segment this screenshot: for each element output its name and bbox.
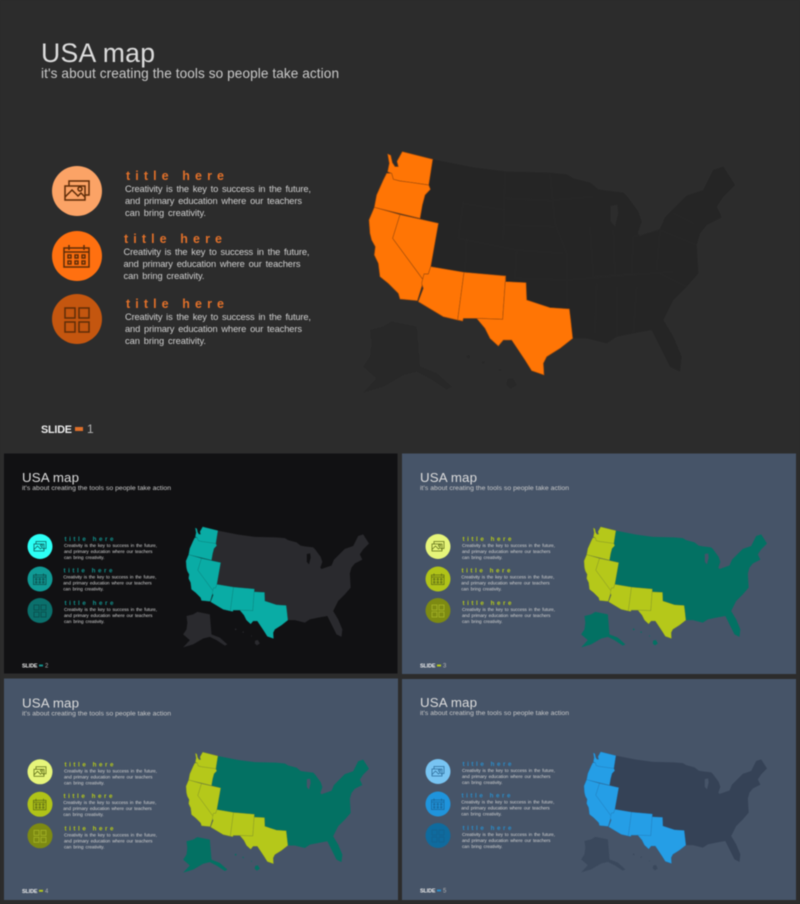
icon: grid (426, 598, 450, 623)
title: USA map (420, 695, 477, 710)
row 1 text (125, 169, 311, 218)
row 3 text: can bring creativity. (64, 619, 104, 624)
row 3 text: Creativity is the key to success in the future, (64, 607, 157, 612)
row 1 text: and primary education where our teachers (64, 549, 153, 554)
row 2 text (124, 232, 310, 281)
icon: calendar (28, 792, 52, 817)
row 2 text: and primary education where our teachers (461, 580, 550, 586)
row 1 text: and primary education where our teachers (125, 196, 302, 206)
row 2 text: and primary education where our teachers (461, 806, 550, 810)
icon: calendar (52, 231, 102, 281)
icon: calendar (426, 792, 450, 816)
row 1 text: Creativity is the key to success in the future, (462, 768, 555, 773)
icon: grid (426, 823, 450, 848)
row 2 text: title here (64, 793, 113, 800)
map (183, 527, 369, 647)
slide number: SLIDE (41, 424, 72, 436)
row 2 text: and primary education where our teachers (63, 806, 152, 811)
row 2 text: Creativity is the key to success in the future, (461, 800, 554, 804)
row 3 text: Creativity is the key to success in the future, (64, 832, 157, 837)
icon: calendar (426, 566, 450, 592)
slide number: 4 (45, 889, 49, 895)
row 1 text (462, 536, 555, 560)
row 3 text: and primary education where our teachers (64, 838, 153, 843)
row 1 text: title here (462, 536, 512, 543)
icon: image (28, 534, 52, 559)
icon: grid (28, 823, 52, 848)
row 3 text: and primary education where our teachers (462, 613, 551, 618)
panel: slide 4 (4, 678, 398, 900)
row 3 text: Creativity is the key to success in the future, (462, 607, 555, 612)
row 1 text (462, 761, 555, 785)
slide number: 3 (443, 664, 447, 670)
slide number: 5 (443, 888, 447, 894)
slide number (22, 889, 49, 895)
row 3 text: can bring creativity. (462, 619, 502, 624)
slide number (420, 888, 447, 894)
icon: image (426, 759, 450, 784)
title: USA map (22, 470, 79, 485)
row 2 text: Creativity is the key to success in the future, (63, 800, 156, 805)
subtitle: it's about creating the tools so people take action (22, 710, 171, 717)
icon: grid (52, 294, 102, 344)
row 2 text: can bring creativity. (124, 271, 204, 281)
title: USA map (420, 470, 477, 485)
row 2 text: can bring creativity. (461, 812, 502, 816)
row 1 text: can bring creativity. (462, 555, 502, 560)
slide number (41, 422, 94, 436)
row 3 text (462, 600, 555, 624)
panel: slide 2 (4, 454, 398, 674)
subtitle: it's about creating the tools so people take action (420, 710, 569, 717)
slide number: 1 (87, 422, 94, 436)
row 3 text: title here (462, 825, 512, 832)
row 2 text: Creativity is the key to success in the future, (461, 574, 554, 580)
row 2 text (63, 793, 156, 817)
row 2 text: can bring creativity. (461, 586, 502, 592)
slide number: SLIDE (420, 888, 436, 894)
row 2 text: title here (462, 568, 511, 574)
row 1 text: Creativity is the key to success in the future, (462, 543, 555, 548)
row 2 text (63, 568, 156, 592)
icon: image (28, 759, 52, 784)
row 1 text (64, 536, 157, 560)
panel: slide 5 (402, 679, 796, 900)
icon: image (52, 166, 102, 216)
icon: grid (28, 598, 52, 623)
row 1 text: Creativity is the key to success in the future, (64, 768, 157, 773)
row 3 text: Creativity is the key to success in the future, (462, 832, 555, 837)
map (363, 152, 735, 393)
row 1 text: Creativity is the key to success in the future, (64, 543, 157, 548)
row 3 text: and primary education where our teachers (125, 324, 302, 334)
row 2 text: and primary education where our teachers (63, 580, 152, 586)
row 1 text: can bring creativity. (462, 780, 502, 785)
row 2 text: and primary education where our teachers (124, 259, 301, 269)
row 1 text: title here (462, 761, 512, 768)
row 3 text (64, 825, 157, 849)
slide number: SLIDE (420, 664, 436, 670)
slide number: SLIDE (22, 664, 38, 670)
subtitle: it's about creating the tools so people take action (41, 66, 339, 81)
subtitle: it's about creating the tools so people take action (22, 485, 171, 492)
row 3 text: Creativity is the key to success in the future, (125, 312, 311, 322)
subtitle: it's about creating the tools so people take action (420, 485, 569, 492)
row 2 text: Creativity is the key to success in the future, (124, 247, 310, 257)
row 2 text: Creativity is the key to success in the future, (63, 574, 156, 580)
row 1 text: and primary education where our teachers (462, 774, 551, 779)
title: USA map (22, 695, 79, 710)
map (581, 752, 767, 872)
panel: slide 1 (41, 38, 735, 436)
row 2 text: title here (462, 792, 511, 800)
row 1 text (64, 761, 157, 785)
row 3 text: and primary education where our teachers (64, 613, 153, 618)
row 3 text: title here (126, 297, 224, 311)
row 1 text: and primary education where our teachers (64, 774, 153, 779)
row 1 text: Creativity is the key to success in the future, (125, 184, 311, 194)
row 2 text: title here (124, 232, 222, 246)
slide number (420, 664, 447, 670)
row 3 text: title here (462, 600, 512, 607)
row 2 text: title here (64, 568, 113, 574)
row 1 text: title here (126, 169, 224, 183)
row 1 text: and primary education where our teachers (462, 549, 551, 554)
row 3 text (462, 825, 555, 849)
map (183, 752, 369, 873)
map (581, 527, 767, 647)
row 1 text: can bring creativity. (64, 555, 104, 560)
row 3 text: title here (64, 600, 114, 607)
icon: image (426, 534, 450, 559)
row 3 text (64, 600, 157, 624)
row 2 text: can bring creativity. (63, 812, 104, 817)
row 1 text: title here (64, 536, 114, 543)
row 2 text (461, 568, 554, 592)
row 3 text (125, 297, 311, 346)
row 3 text: can bring creativity. (125, 336, 206, 346)
panel: slide 3 (402, 454, 796, 674)
row 3 text: title here (64, 825, 114, 832)
row 3 text: and primary education where our teachers (462, 838, 551, 843)
icon: calendar (28, 566, 52, 592)
row 1 text: can bring creativity. (125, 208, 206, 218)
row 2 text (461, 792, 554, 816)
slide number: SLIDE (22, 889, 38, 895)
row 1 text: can bring creativity. (64, 780, 104, 785)
slide number: 2 (45, 664, 49, 670)
title: USA map (41, 38, 155, 68)
slide number (22, 664, 49, 670)
row 2 text: can bring creativity. (63, 586, 104, 592)
row 3 text: can bring creativity. (64, 844, 104, 849)
row 3 text: can bring creativity. (462, 844, 502, 849)
row 1 text: title here (64, 761, 114, 768)
